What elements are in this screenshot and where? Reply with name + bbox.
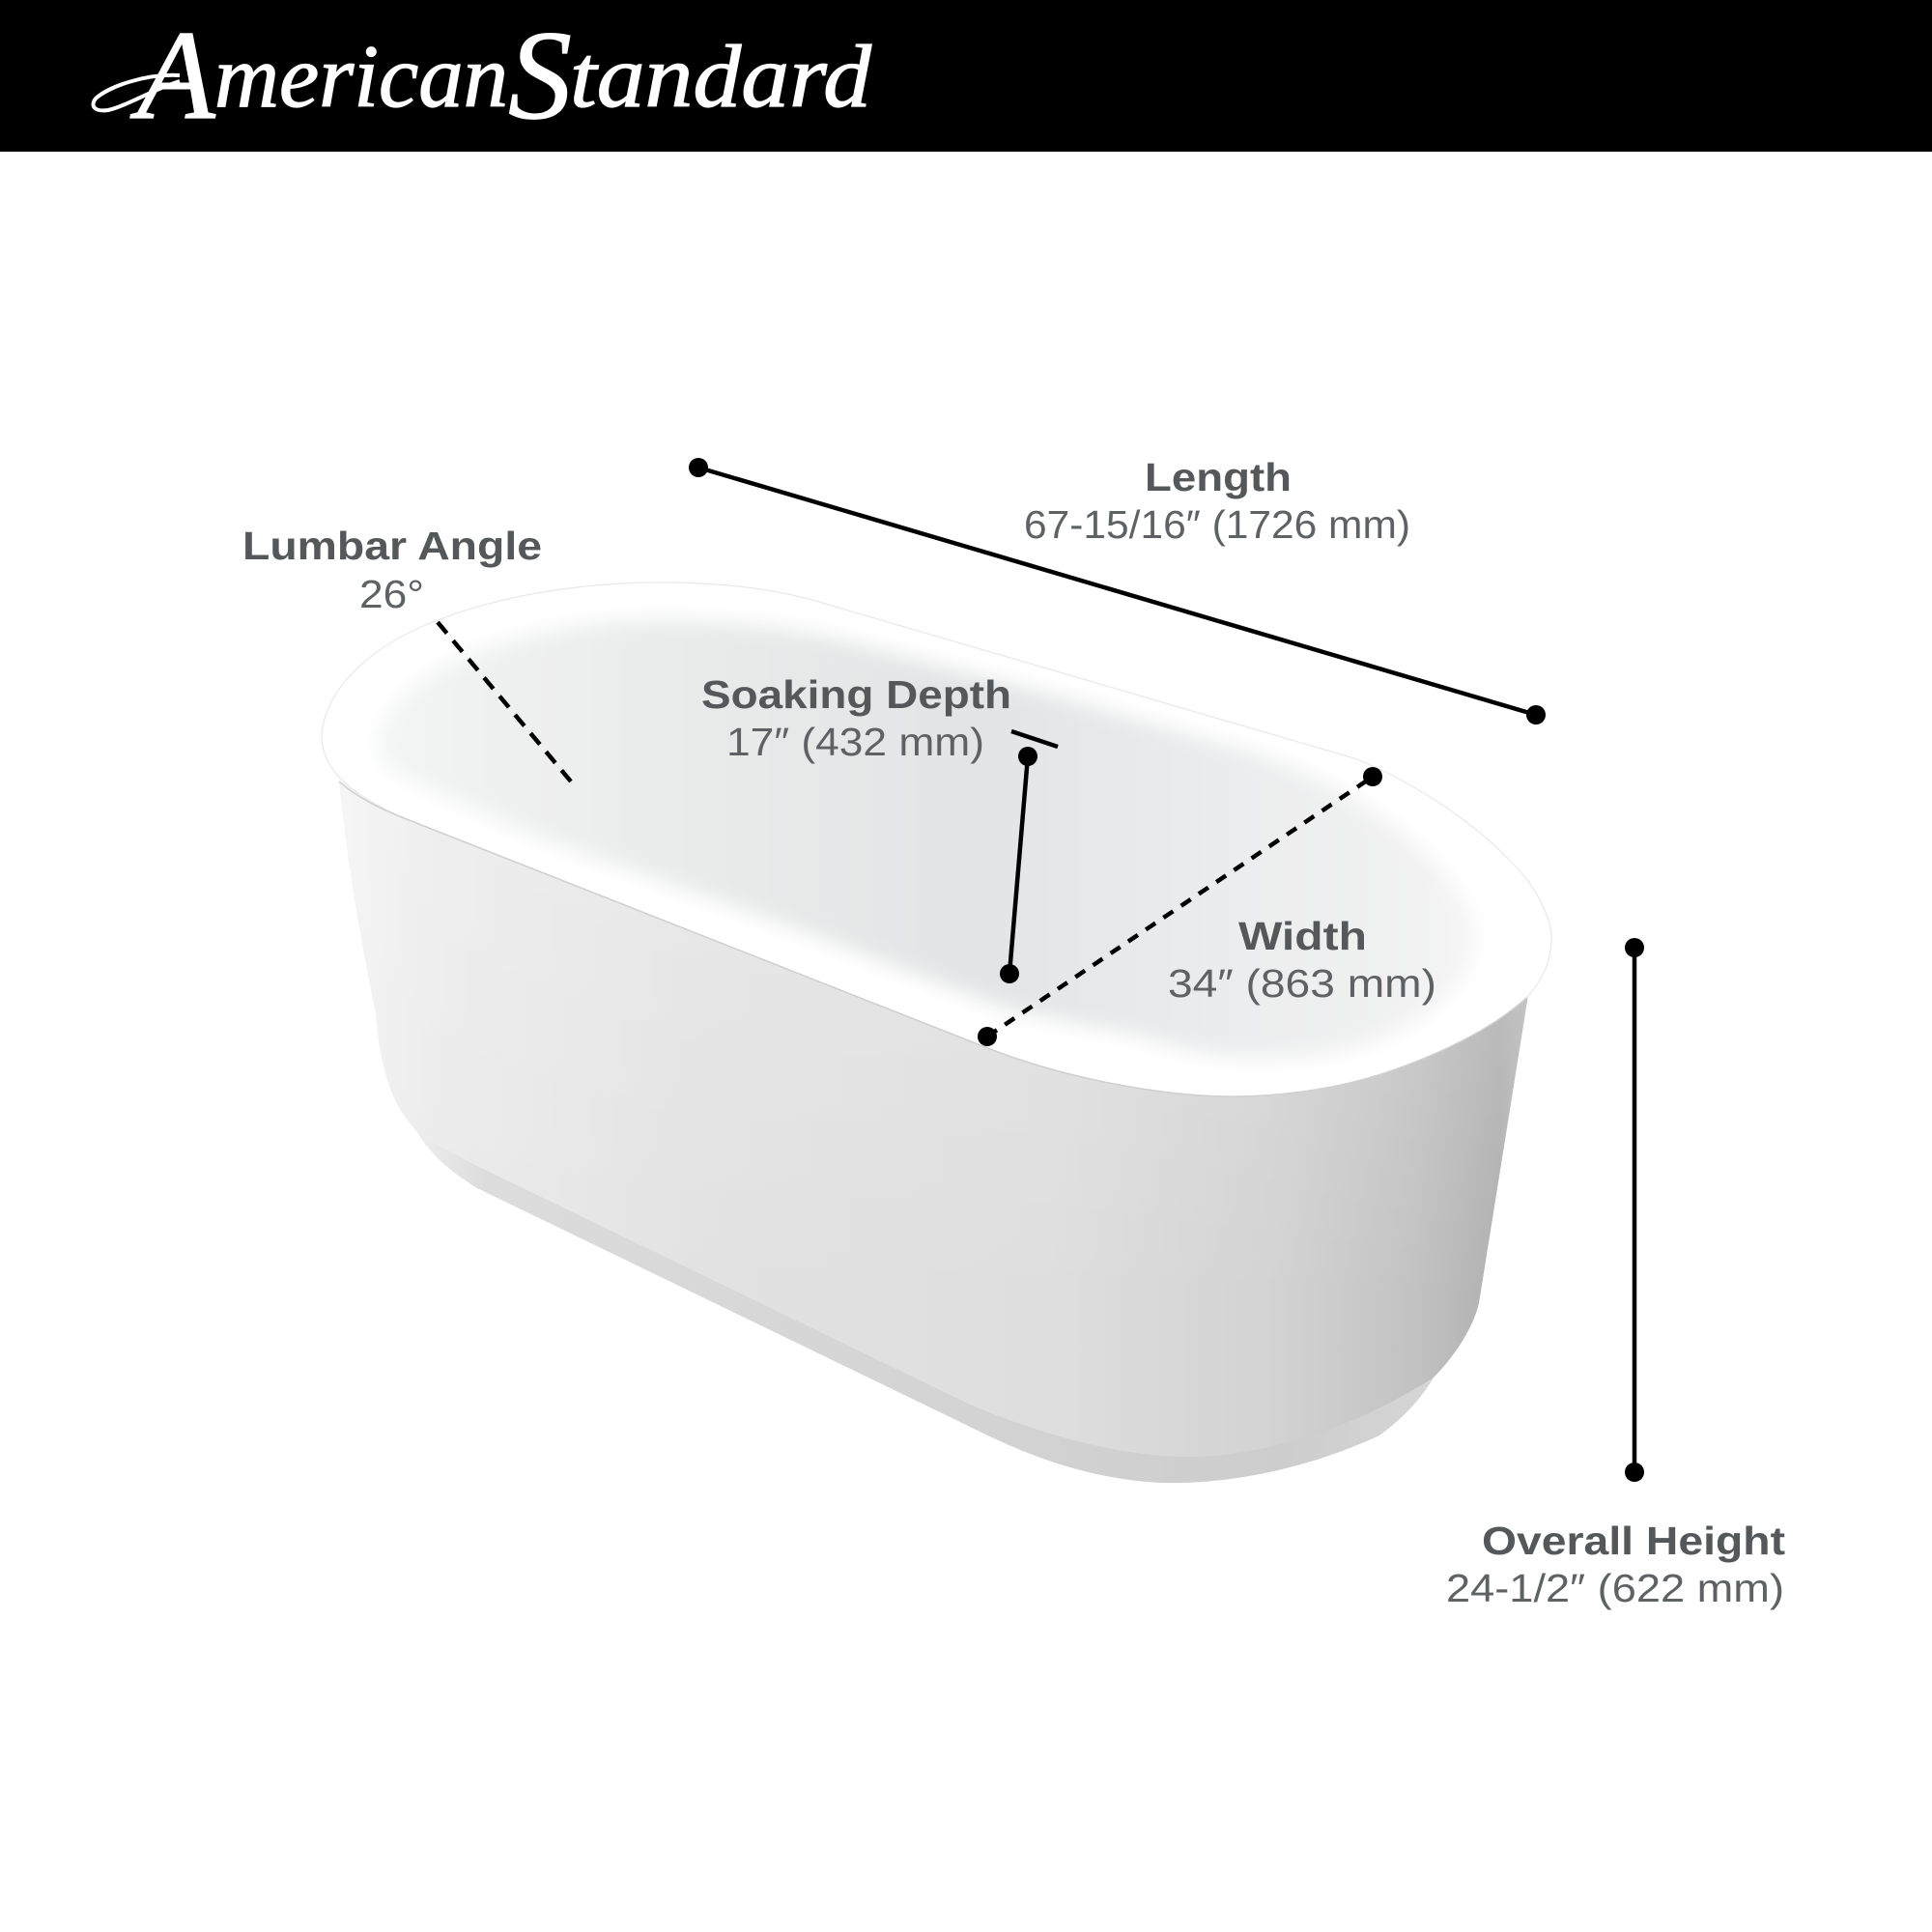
soaking depth dimension (701, 672, 1058, 983)
length dimension (689, 455, 1546, 724)
soaking depth value: 17″ (432 mm) (726, 720, 984, 764)
height label: Overall Height (1482, 1519, 1785, 1563)
logo: American Standard: tandard (570, 27, 872, 126)
logo: American Standard: merican (214, 27, 508, 126)
lumbar value: 26° (359, 572, 424, 616)
width dimension (978, 767, 1436, 1046)
tub rim (322, 582, 1551, 1096)
length value: 67-15/16″ (1726 mm) (1024, 502, 1410, 547)
header bar with logo (0, 0, 1932, 152)
overall height dimension (1446, 938, 1785, 1610)
logo: American Standard: S (508, 4, 572, 146)
bathtub illustration (322, 582, 1551, 1483)
soaking depth label: Soaking Depth (701, 672, 1011, 717)
logo: American Standard (94, 4, 872, 146)
tub base plinth (415, 1063, 1434, 1483)
lumbar dashed line (438, 622, 571, 781)
width value: 34″ (863 mm) (1168, 961, 1436, 1006)
width dashed line (978, 767, 1382, 1046)
lumbar angle dimension (242, 524, 571, 781)
soaking depth line (1000, 731, 1058, 983)
height line (1625, 938, 1644, 1482)
rim lower edge shadow line (339, 781, 1526, 1096)
height value: 24-1/2″ (622 mm) (1446, 1566, 1784, 1610)
length label: Length (1145, 455, 1292, 499)
tub inner basin (379, 620, 1473, 1058)
width label: Width (1238, 914, 1367, 958)
lumbar label: Lumbar Angle (242, 524, 542, 568)
length line (689, 458, 1546, 724)
logo: American Standard: A (129, 4, 216, 146)
body highlight under rim (339, 781, 1528, 1457)
tub outer body (339, 781, 1528, 1457)
